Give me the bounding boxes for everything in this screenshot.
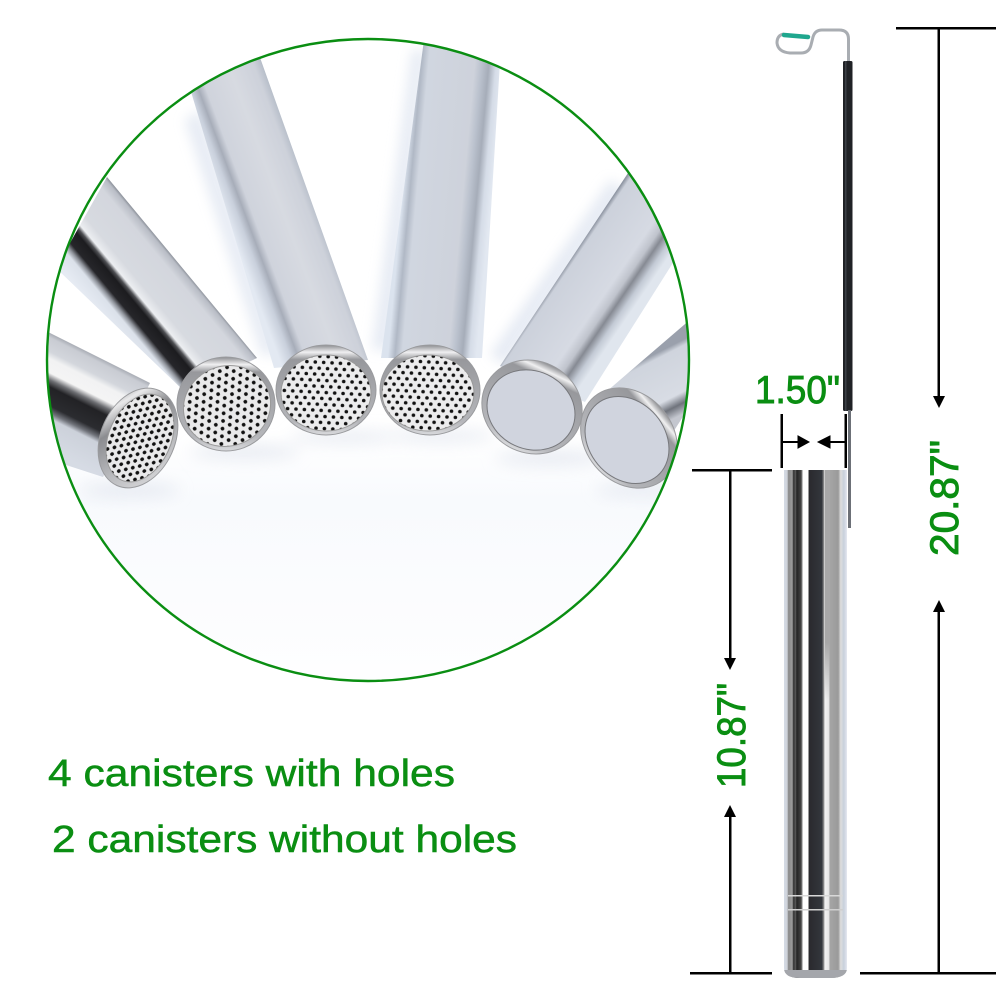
dimension: 10.87 inch canister length (690, 469, 772, 974)
canister 1 body (48, 332, 150, 477)
label: 1.50 inch: 1.50" (755, 369, 840, 412)
canister 2 perforated end (176, 356, 276, 452)
soft shadows under canisters (80, 430, 685, 497)
canister 1 perforated end (98, 388, 178, 488)
dimension: 1.50 inch diameter (755, 369, 847, 468)
dimension: 20.87 inch total length (860, 27, 996, 974)
canister 3 perforated end (276, 345, 376, 435)
text: 4 canisters with holes: 4 canisters with holes (48, 753, 455, 795)
canister 5 body (500, 170, 676, 402)
canister 2 body (56, 177, 257, 392)
panel: canister photo circle (20, 39, 697, 681)
soft reflections beside canisters (185, 50, 626, 365)
label: 20.87 inch: 20.87" (923, 440, 967, 556)
canister 4 body (381, 40, 500, 358)
label: 10.87 inch: 10.87" (710, 683, 754, 788)
canister 6 body (610, 324, 688, 430)
product: steel canister (784, 470, 847, 980)
circle outline (47, 39, 689, 681)
canister 6 solid end (580, 387, 678, 489)
canister 3 body (189, 52, 368, 368)
text: 2 canisters without holes: 2 canisters without holes (52, 819, 517, 861)
canister 4 perforated end (380, 345, 480, 435)
product: hook and rod (777, 30, 852, 528)
canister 5 solid end (481, 360, 583, 454)
